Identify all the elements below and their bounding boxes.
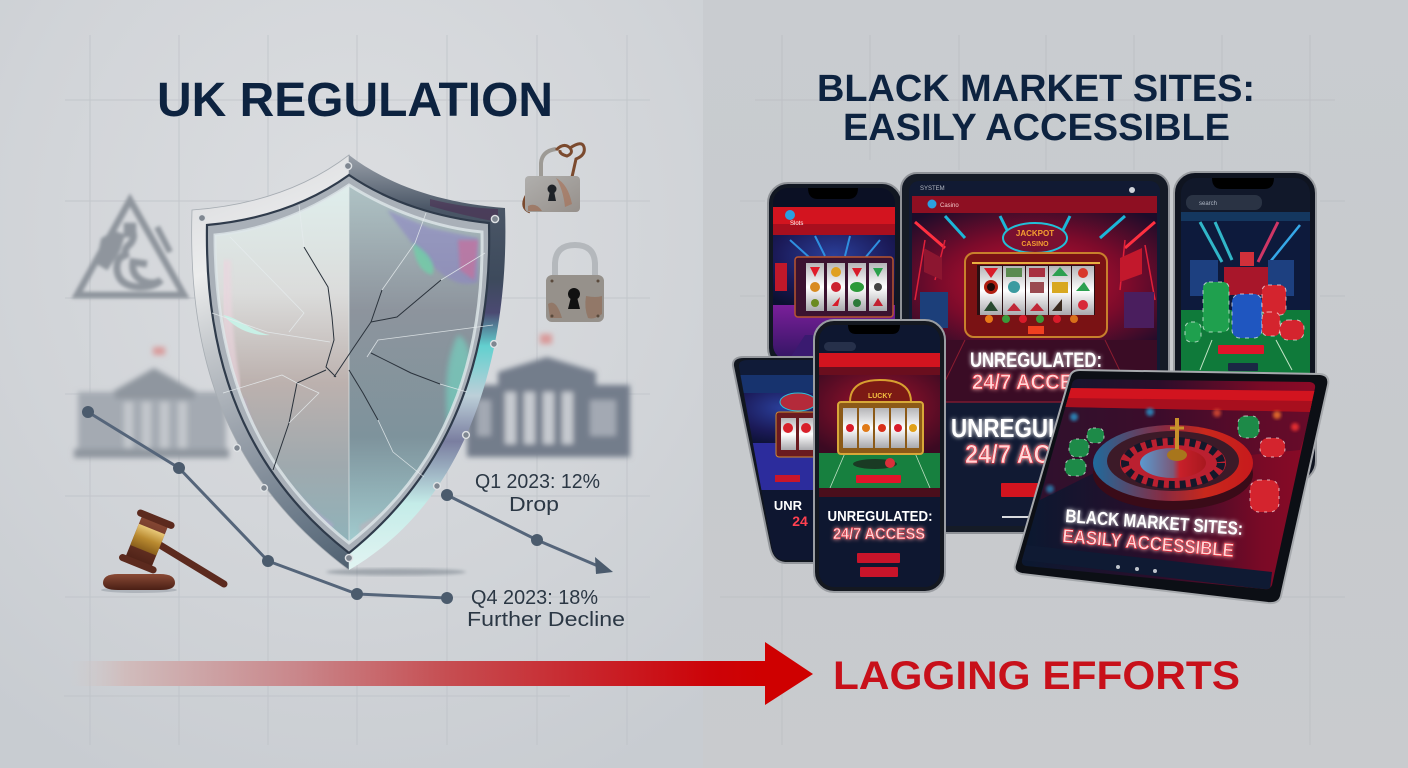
device: centre tablet — [901, 173, 1169, 533]
callout: Q1 2023: Q1 2023: 12% — [475, 471, 600, 493]
glass centre line — [348, 185, 350, 543]
device: centre tablet: 24/7 ACCESS — [972, 371, 1100, 394]
slot machine gold — [838, 380, 923, 469]
title: Black Market Sites — [817, 68, 1255, 149]
device: phone front: UNREGULATED: — [828, 508, 932, 525]
shield glass — [210, 180, 489, 550]
icon: broken rusty padlock — [524, 144, 584, 212]
casino chips — [1065, 416, 1285, 512]
device: phone bottom left: UNR — [774, 498, 803, 513]
title: Black Market Sites: BLACK MARKET SITES: — [817, 68, 1255, 110]
shield shadow — [326, 568, 466, 576]
shield with cracked glass — [192, 155, 505, 570]
blurred government building right — [467, 334, 630, 457]
slot machine — [795, 257, 893, 317]
arrow: lagging efforts — [70, 642, 813, 705]
device: phone top left: Slots — [790, 221, 803, 227]
device: phone front: 24/7 ACCESS — [833, 526, 925, 543]
neon sign — [1003, 223, 1067, 253]
device: centre tablet: UNREGULATED — [951, 413, 1121, 443]
callout: Q4 2023: Further Decline — [467, 609, 625, 631]
device: front tablet — [1015, 370, 1330, 605]
slot machine — [965, 253, 1107, 337]
shield cracks — [212, 205, 493, 477]
callout: Q4 2023 — [467, 587, 625, 631]
neon sign: JACKPOT — [1016, 229, 1054, 238]
label: Lagging Efforts: LAGGING EFFORTS — [833, 654, 1240, 698]
slot machine gold: LUCKY — [868, 393, 892, 400]
line chart decline left segment — [82, 406, 453, 604]
title: UK Regulation: UK REGULATION — [157, 74, 553, 127]
callout: Q4 2023: Q4 2023: 18% — [471, 587, 598, 609]
device: phone top left — [768, 183, 902, 368]
line chart decline right segment — [441, 489, 613, 574]
device: front tablet: EASILY ACCESSIBLE — [1062, 526, 1235, 562]
blurred warning triangle icon — [77, 200, 184, 295]
background grid right — [720, 35, 1345, 745]
glass inner border — [215, 185, 482, 543]
callout: Q1 2023: Drop — [509, 494, 559, 516]
icon: gavel — [101, 508, 224, 593]
device: centre tablet: SYSTEM — [920, 186, 945, 192]
device: centre tablet: UNREGULATED: — [970, 349, 1102, 372]
chip stacks — [1185, 282, 1304, 342]
blurred government building left — [74, 347, 229, 458]
shield metal rim — [192, 155, 505, 570]
neon sign: CASINO — [1021, 241, 1049, 248]
device: phone front — [814, 320, 945, 592]
shield rivets — [198, 162, 499, 562]
device: phone bottom left — [732, 356, 813, 564]
callout: Q1 2023 — [475, 471, 600, 516]
device: centre tablet: Casino — [940, 203, 959, 209]
neon light rays — [915, 216, 1155, 248]
device: centre tablet: 24/7 ACCESS — [965, 439, 1115, 469]
right panel background — [703, 0, 1408, 768]
device: phone top right — [1174, 172, 1316, 482]
left panel background — [0, 0, 703, 768]
device: phone bottom left: 24 — [792, 513, 808, 529]
device: front tablet: BLACK MARKET SITES: — [1065, 505, 1244, 539]
device: phone top right: search — [1199, 201, 1217, 207]
roulette wheel — [1093, 418, 1253, 510]
background grid left — [64, 35, 650, 745]
title: Black Market Sites: EASILY ACCESSIBLE — [843, 107, 1230, 149]
icon: rusty padlock — [546, 245, 604, 322]
